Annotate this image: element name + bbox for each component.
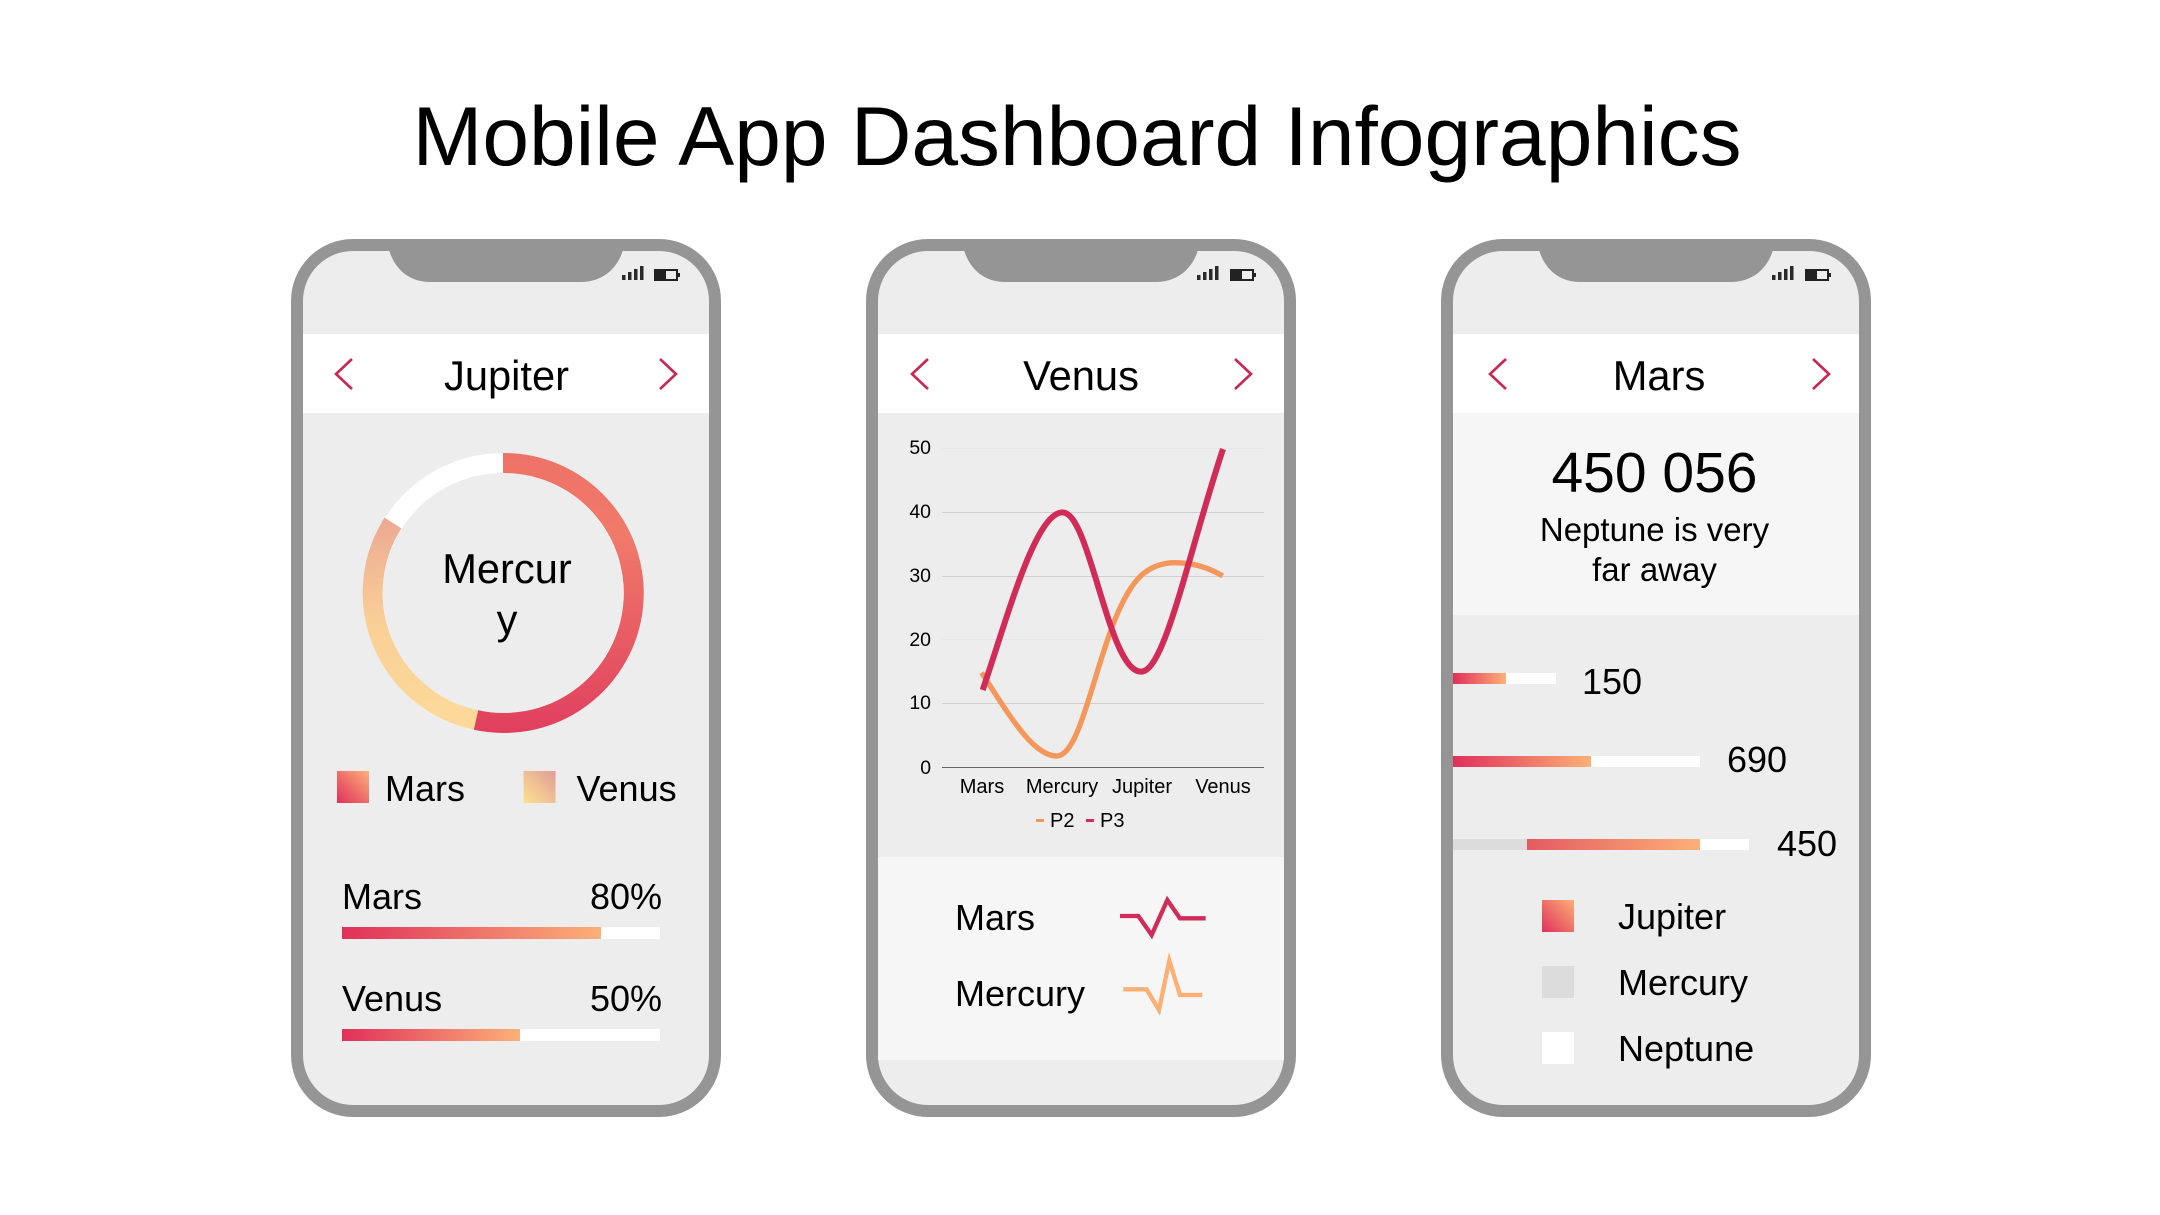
icon: battery <box>1231 270 1256 280</box>
title: Mobile App Dashboard Infographics <box>412 89 1742 183</box>
heading: Jupiter <box>444 352 569 399</box>
header bar <box>1453 334 1859 413</box>
line chart: P3 <box>1100 810 1124 832</box>
legend <box>337 768 677 809</box>
line chart: Mercury <box>1026 776 1098 798</box>
panel: big number: Neptune is very <box>1540 511 1770 548</box>
panel: big number <box>1453 413 1859 615</box>
panel: sparkline legend <box>878 857 1284 1060</box>
panel: phone Jupiter <box>297 245 715 1111</box>
line chart: 0 <box>920 757 931 779</box>
icon: battery <box>655 270 680 280</box>
legend: Neptune <box>1618 1028 1754 1069</box>
notch <box>964 250 1198 282</box>
icon: signal <box>1197 266 1218 280</box>
line chart: 20 <box>909 629 931 651</box>
phone frame <box>297 245 715 1111</box>
line chart: 10 <box>909 692 931 714</box>
line chart: Jupiter <box>1112 776 1172 798</box>
donut label: Mercur <box>442 545 572 592</box>
donut label <box>442 545 572 643</box>
progress: Venus <box>342 978 662 1041</box>
heading: Mars <box>1613 352 1705 399</box>
line chart: 40 <box>909 501 931 523</box>
icon: left chevron <box>336 359 352 389</box>
donut label: y <box>497 596 518 643</box>
notch <box>389 250 623 282</box>
legend: Jupiter <box>1618 896 1726 937</box>
phone frame <box>872 245 1290 1111</box>
icon: right chevron <box>1235 359 1251 389</box>
progress: Mars: 80% <box>590 876 662 917</box>
line chart: Mars <box>960 776 1004 798</box>
progress: Mars <box>342 876 662 939</box>
panel: phone Venus <box>872 245 1290 1111</box>
icon: left chevron <box>912 359 928 389</box>
sparkline row: Mercury <box>955 961 1202 1014</box>
progress: Venus: Venus <box>342 978 442 1019</box>
legend: Mars <box>385 768 465 809</box>
panel: big number: 450 056 <box>1551 441 1758 505</box>
phone frame <box>1447 245 1865 1111</box>
legend: Mercury <box>1618 962 1748 1003</box>
icon: signal <box>1772 266 1794 280</box>
donut chart <box>373 463 634 723</box>
progress: Venus: 50% <box>590 978 662 1019</box>
sparkline row: Mars <box>955 897 1206 938</box>
sparkline row: Mars: Mars <box>955 897 1035 938</box>
progress: Mars: Mars <box>342 876 422 917</box>
panel: phone Mars <box>1447 245 1865 1111</box>
panel: big number: far away <box>1592 551 1717 588</box>
bar: 150 <box>1453 661 1642 702</box>
bar: 450: 450 <box>1777 823 1837 864</box>
bar: 150: 150 <box>1582 661 1642 702</box>
bar: 450 <box>1453 823 1837 864</box>
heading: Venus <box>1023 352 1139 399</box>
icon: left chevron <box>1490 359 1506 389</box>
header bar <box>303 334 709 413</box>
line chart: 50 <box>909 437 931 459</box>
icon: battery <box>1806 270 1831 280</box>
bar: 690: 690 <box>1727 739 1787 780</box>
line chart <box>909 437 1264 832</box>
legend: Venus <box>576 768 677 809</box>
sparkline row: Mercury: Mercury <box>955 973 1085 1014</box>
notch <box>1539 250 1773 282</box>
line chart: P2 <box>1050 810 1074 832</box>
legend <box>1542 896 1754 1069</box>
header bar <box>878 334 1284 413</box>
line chart: Venus <box>1195 776 1251 798</box>
icon: signal <box>622 266 644 280</box>
line chart: 30 <box>909 565 931 587</box>
bar: 690 <box>1453 739 1787 780</box>
icon: right chevron <box>1813 359 1829 389</box>
icon: right chevron <box>660 359 676 389</box>
